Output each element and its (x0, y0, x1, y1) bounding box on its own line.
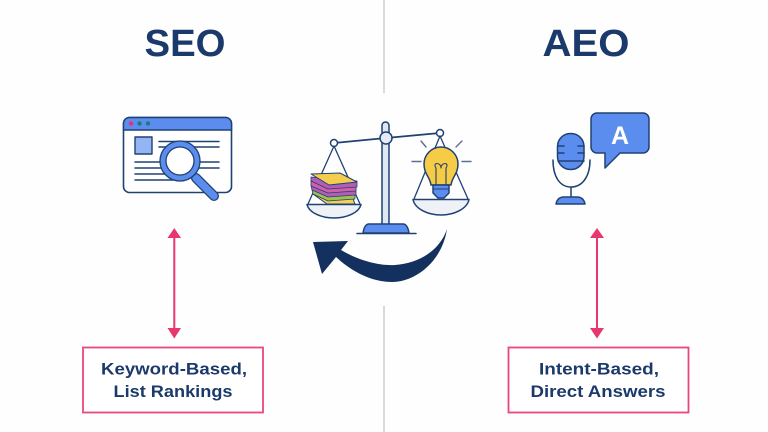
icon: microphone and answer bubble (553, 113, 649, 204)
callout: AEO: Intent-Based, (539, 360, 659, 378)
callout: AEO (508, 348, 688, 412)
arrow: SEO double-headed (168, 228, 181, 338)
callout: SEO: List Rankings (114, 382, 232, 401)
icon: browser with magnifying glass (124, 118, 232, 196)
icon: microphone and answer bubble: A (611, 122, 629, 150)
callout: AEO: Direct Answers (530, 382, 666, 401)
icon: balance scale (307, 122, 471, 234)
right pan: light bulb (412, 136, 471, 215)
arrow: curved swap arrow (313, 229, 447, 282)
left pan: stacked pages (307, 146, 361, 218)
arrow: AEO double-headed (590, 228, 604, 338)
heading: SEO: SEO (144, 23, 226, 65)
heading: AEO: AEO (542, 23, 630, 65)
callout: SEO: Keyword-Based, (101, 360, 247, 378)
callout: SEO (83, 348, 263, 412)
